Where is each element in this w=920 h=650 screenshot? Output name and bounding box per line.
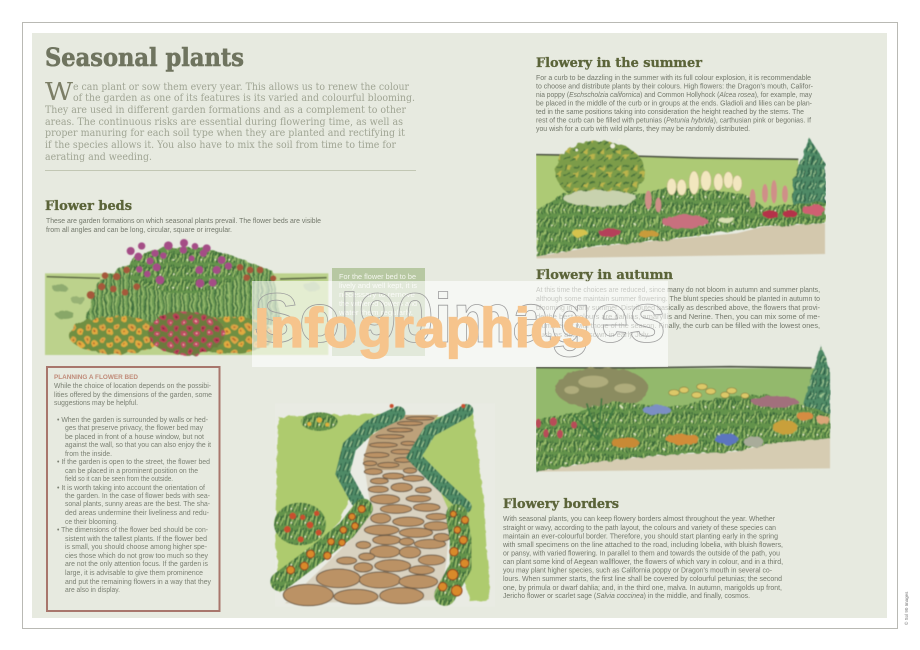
section: flowery borders text: one, by primula or dwarf dahlia; and, in the third one, malva. In autumn, marigolds up front,: [503, 585, 782, 592]
section: flowery in the summer text: nia poppy (Eschscholzia californica) and Common Hollyhock (Alcea rosea), for example, may: [536, 92, 812, 99]
section: flowery borders text: or pansy, with varied flowering. In parallel to them and towards the outside of the path, you: [503, 550, 780, 558]
panel: planning a flower bed: • The dimensions of the flower bed should be con-: [57, 527, 209, 534]
callout: flower bed tip: water them regularly.: [338, 310, 413, 317]
panel: planning a flower bed: large, it is advisable to give them prominence: [65, 570, 203, 577]
panel: planning a flower bed: lities offered by the dimensions of the garden, some: [54, 392, 212, 399]
section: flower beds heading and text: These are garden formations on which seasonal plants prevail. The flower beds are visible: [46, 218, 321, 225]
section: flowery in autumn text: Flowery in autumn: [536, 268, 674, 283]
section: flowery in the summer text: ted in the same positions taking into consideration the height reached by the stems. The: [536, 109, 804, 116]
section: flowery borders text: Flowery borders: [503, 497, 619, 512]
illustration: flower bed: [45, 239, 328, 355]
section: flowery in the summer text: For a curb to be dazzling in the summer with its full colour explosion, it is recommendable: [536, 75, 811, 82]
section: flowery in autumn text: such as asters, sown in early July.: [536, 332, 650, 339]
section: flowery borders text: can plant some kind of Aegean wallflower, the flowers of which vary in colour, and in a third,: [503, 559, 783, 566]
section: flowery in autumn text: At this time the choices are reduced, since many do not bloom in autumn and summer plants,: [536, 287, 820, 294]
section: flowery borders text: you may plant higher species, such as California poppy or Dragon's mouth in several co-: [503, 568, 773, 574]
panel: planning a flower bed: is small, you should choose among higher spe-: [65, 544, 208, 551]
section: flowery borders text: Jericho flower or scarlet sage (Salvia coccinea) in the middle, and finally, cosmos.: [503, 593, 750, 600]
text block: introduction: of the garden as one of its features is its varied and colourful blooming.: [73, 92, 415, 104]
panel: planning a flower bed: [47, 367, 220, 611]
section: flowery borders text: lours. When summer starts, the first line shall be covered by colourful petunias; the second: [503, 576, 782, 583]
title: Seasonal plants: [45, 43, 244, 72]
panel: planning a flower bed: • If the garden is open to the street, the flower bed: [57, 459, 210, 466]
panel: planning a flower bed: can be placed in a prominent position on the: [65, 468, 198, 475]
panel: planning a flower bed: the garden. In the case of flower beds with sea-: [65, 493, 211, 500]
drop cap: W: [45, 78, 73, 106]
text block: introduction: if the species allows it. You also have to mix the soil from time to time for: [45, 139, 397, 151]
section: flowery in autumn text: dium height with those of the season. Finally, the curb can be filled with the lowest ones,: [536, 323, 820, 330]
section: flowery in the summer text: rest of the curb can be filled with petunias (Petunia hybrida), carthusian pink or begonias. If: [536, 118, 811, 124]
panel: planning a flower bed: sistent with the tallest plants. If the flower bed: [65, 536, 207, 543]
panel: planning a flower bed: and put the remaining flowers in a way that they: [65, 579, 211, 586]
text block: introduction: They are used in different garden formations and as a complement to other: [45, 104, 407, 116]
text block: introduction: [45, 78, 415, 163]
illustration: summer flower curb: [536, 138, 825, 258]
panel: planning a flower bed: from the inside.: [65, 451, 112, 458]
panel: planning a flower bed: ges that preserve privacy, the flower bed may: [65, 425, 203, 432]
callout: flower bed tip: [332, 268, 425, 356]
text block: introduction: e can plant or sow them every year. This allows us to renew the colour: [73, 81, 410, 93]
section: flowery in the summer text: be placed in the middle of the curb or in groups at the ends. Gladioli and lilies can be plan-: [536, 100, 813, 108]
section: flowery borders text: With seasonal plants, you can keep flowery borders almost throughout the year. Whether: [503, 516, 776, 523]
section: flowery in the summer text: [536, 56, 814, 133]
text block: introduction: aerating and weeding.: [45, 151, 152, 163]
section: flowery in autumn text: de the best colours are dahlias, amaryllis and Nerine. Then, you can mix some of me-: [536, 314, 821, 321]
section: flowery in the summer text: to choose and distribute plants by their colours. High flowers: the Dragon's mouth, Califor-: [536, 84, 814, 90]
panel: planning a flower bed: • It is worth taking into account the orientation of: [57, 485, 205, 492]
panel: planning a flower bed: field so it can be seen from the outside.: [65, 476, 173, 483]
section: flowery in the summer text: you wish for a curb with wild plants, they may be randomly distributed.: [536, 126, 750, 133]
callout: flower bed tip: lively and well kept, it is: [339, 283, 418, 290]
panel: planning a flower bed: • When the garden is surrounded by walls or hed-: [57, 417, 209, 424]
callout: flower bed tip: the withered flowers and: [339, 301, 417, 308]
panel: planning a flower bed: ce their blooming.: [65, 519, 118, 526]
panel: planning a flower bed: against the wall, so that you can also enjoy the it: [65, 442, 211, 449]
panel: planning a flower bed: sonal plants, sunny areas are the best. The sha-: [65, 501, 211, 508]
section: flowery borders text: with small specimens on the line attached to the road, including lobelia, with bluish flowers,: [502, 542, 783, 549]
callout: flower bed tip: For the flower bed to be: [339, 274, 416, 281]
panel: planning a flower bed: cies those which do not grow too much so they: [65, 553, 208, 560]
panel: planning a flower bed: PLANNING A FLOWER BED: [54, 374, 138, 381]
section: flowery in autumn text: blooming in early summer. Distributed basically as described above, the flowers that provi-: [536, 305, 821, 312]
section: flowery in autumn text: although some maintain summer flowering. The blunt species should be planted in autumn to: [536, 296, 820, 303]
watermark: Infographics: [254, 296, 593, 359]
panel: planning a flower bed: ded areas undermine their liveliness and redu-: [65, 510, 210, 517]
text block: introduction: proper manuring for each soil type when they are planted and rectifying it: [45, 127, 406, 139]
section: flower beds heading and text: Flower beds: [45, 199, 132, 214]
credit: © Sol 90 Images: [903, 591, 909, 625]
panel: planning a flower bed: suggestions may be helpful.: [54, 400, 138, 407]
illustration: stone garden path: [274, 403, 495, 607]
section: flower beds heading and text: [45, 199, 321, 234]
section: flowery in autumn text: [536, 268, 821, 339]
section: flowery borders text: [502, 497, 783, 600]
section: flower beds heading and text: from all angles and can be long, circular, square or irregular.: [46, 227, 232, 234]
panel: planning a flower bed: are also in display.: [65, 587, 120, 594]
callout: flower bed tip: necessary to remove: [339, 292, 415, 299]
section: flowery borders text: maintain an ever-colourful border. Therefore, you should start planting early in the spring: [503, 534, 778, 540]
panel: planning a flower bed: are not the only attention focus. If the garden is: [65, 561, 208, 568]
illustration: autumn flower curb: [536, 345, 830, 472]
watermark: Sol90images: [254, 279, 666, 357]
panel: planning a flower bed: be placed in front of a house window, but not: [65, 434, 204, 441]
section: flowery in the summer text: Flowery in the summer: [536, 56, 702, 71]
section: flowery borders text: straight or wavy, according to the path layout, the colours and variety of these species can: [503, 525, 776, 532]
text block: introduction: areas. The continuous risks are essential during flowering time, as well as: [45, 116, 403, 128]
panel: planning a flower bed: While the choice of location depends on the possibi-: [54, 383, 212, 390]
